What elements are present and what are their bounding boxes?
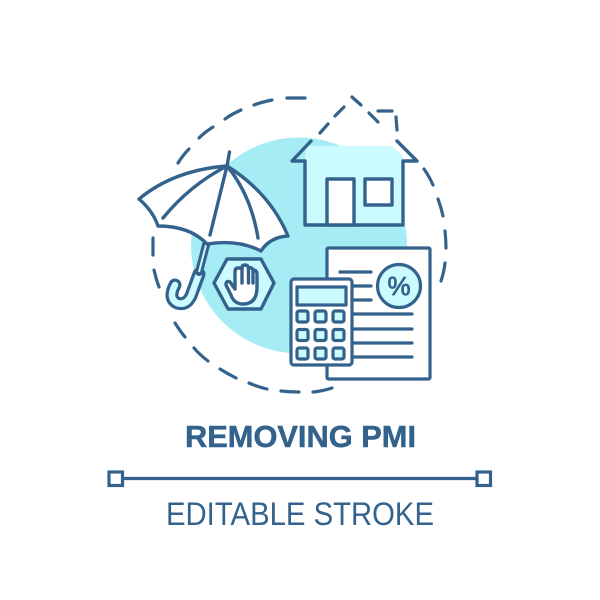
screen [297,287,346,305]
canopy [139,166,288,251]
icon: stop sign with hand [214,259,274,309]
icon: document with percent [327,248,430,379]
background circle [191,138,407,354]
text lines [340,272,412,357]
title: REMOVING PMI [185,419,416,454]
icon: house [292,141,417,225]
subtitle: EDITABLE STROKE [166,496,434,532]
icon: umbrella [139,152,288,304]
percent sign: % [387,271,411,301]
icon: calculator [291,279,352,365]
percent badge [378,264,420,308]
door [327,179,354,225]
ribs [163,152,258,238]
buttons [297,311,344,359]
hand [226,265,257,304]
divider with handles [109,472,490,486]
dashed ring [153,97,446,392]
window [365,179,392,205]
handle [172,245,206,304]
